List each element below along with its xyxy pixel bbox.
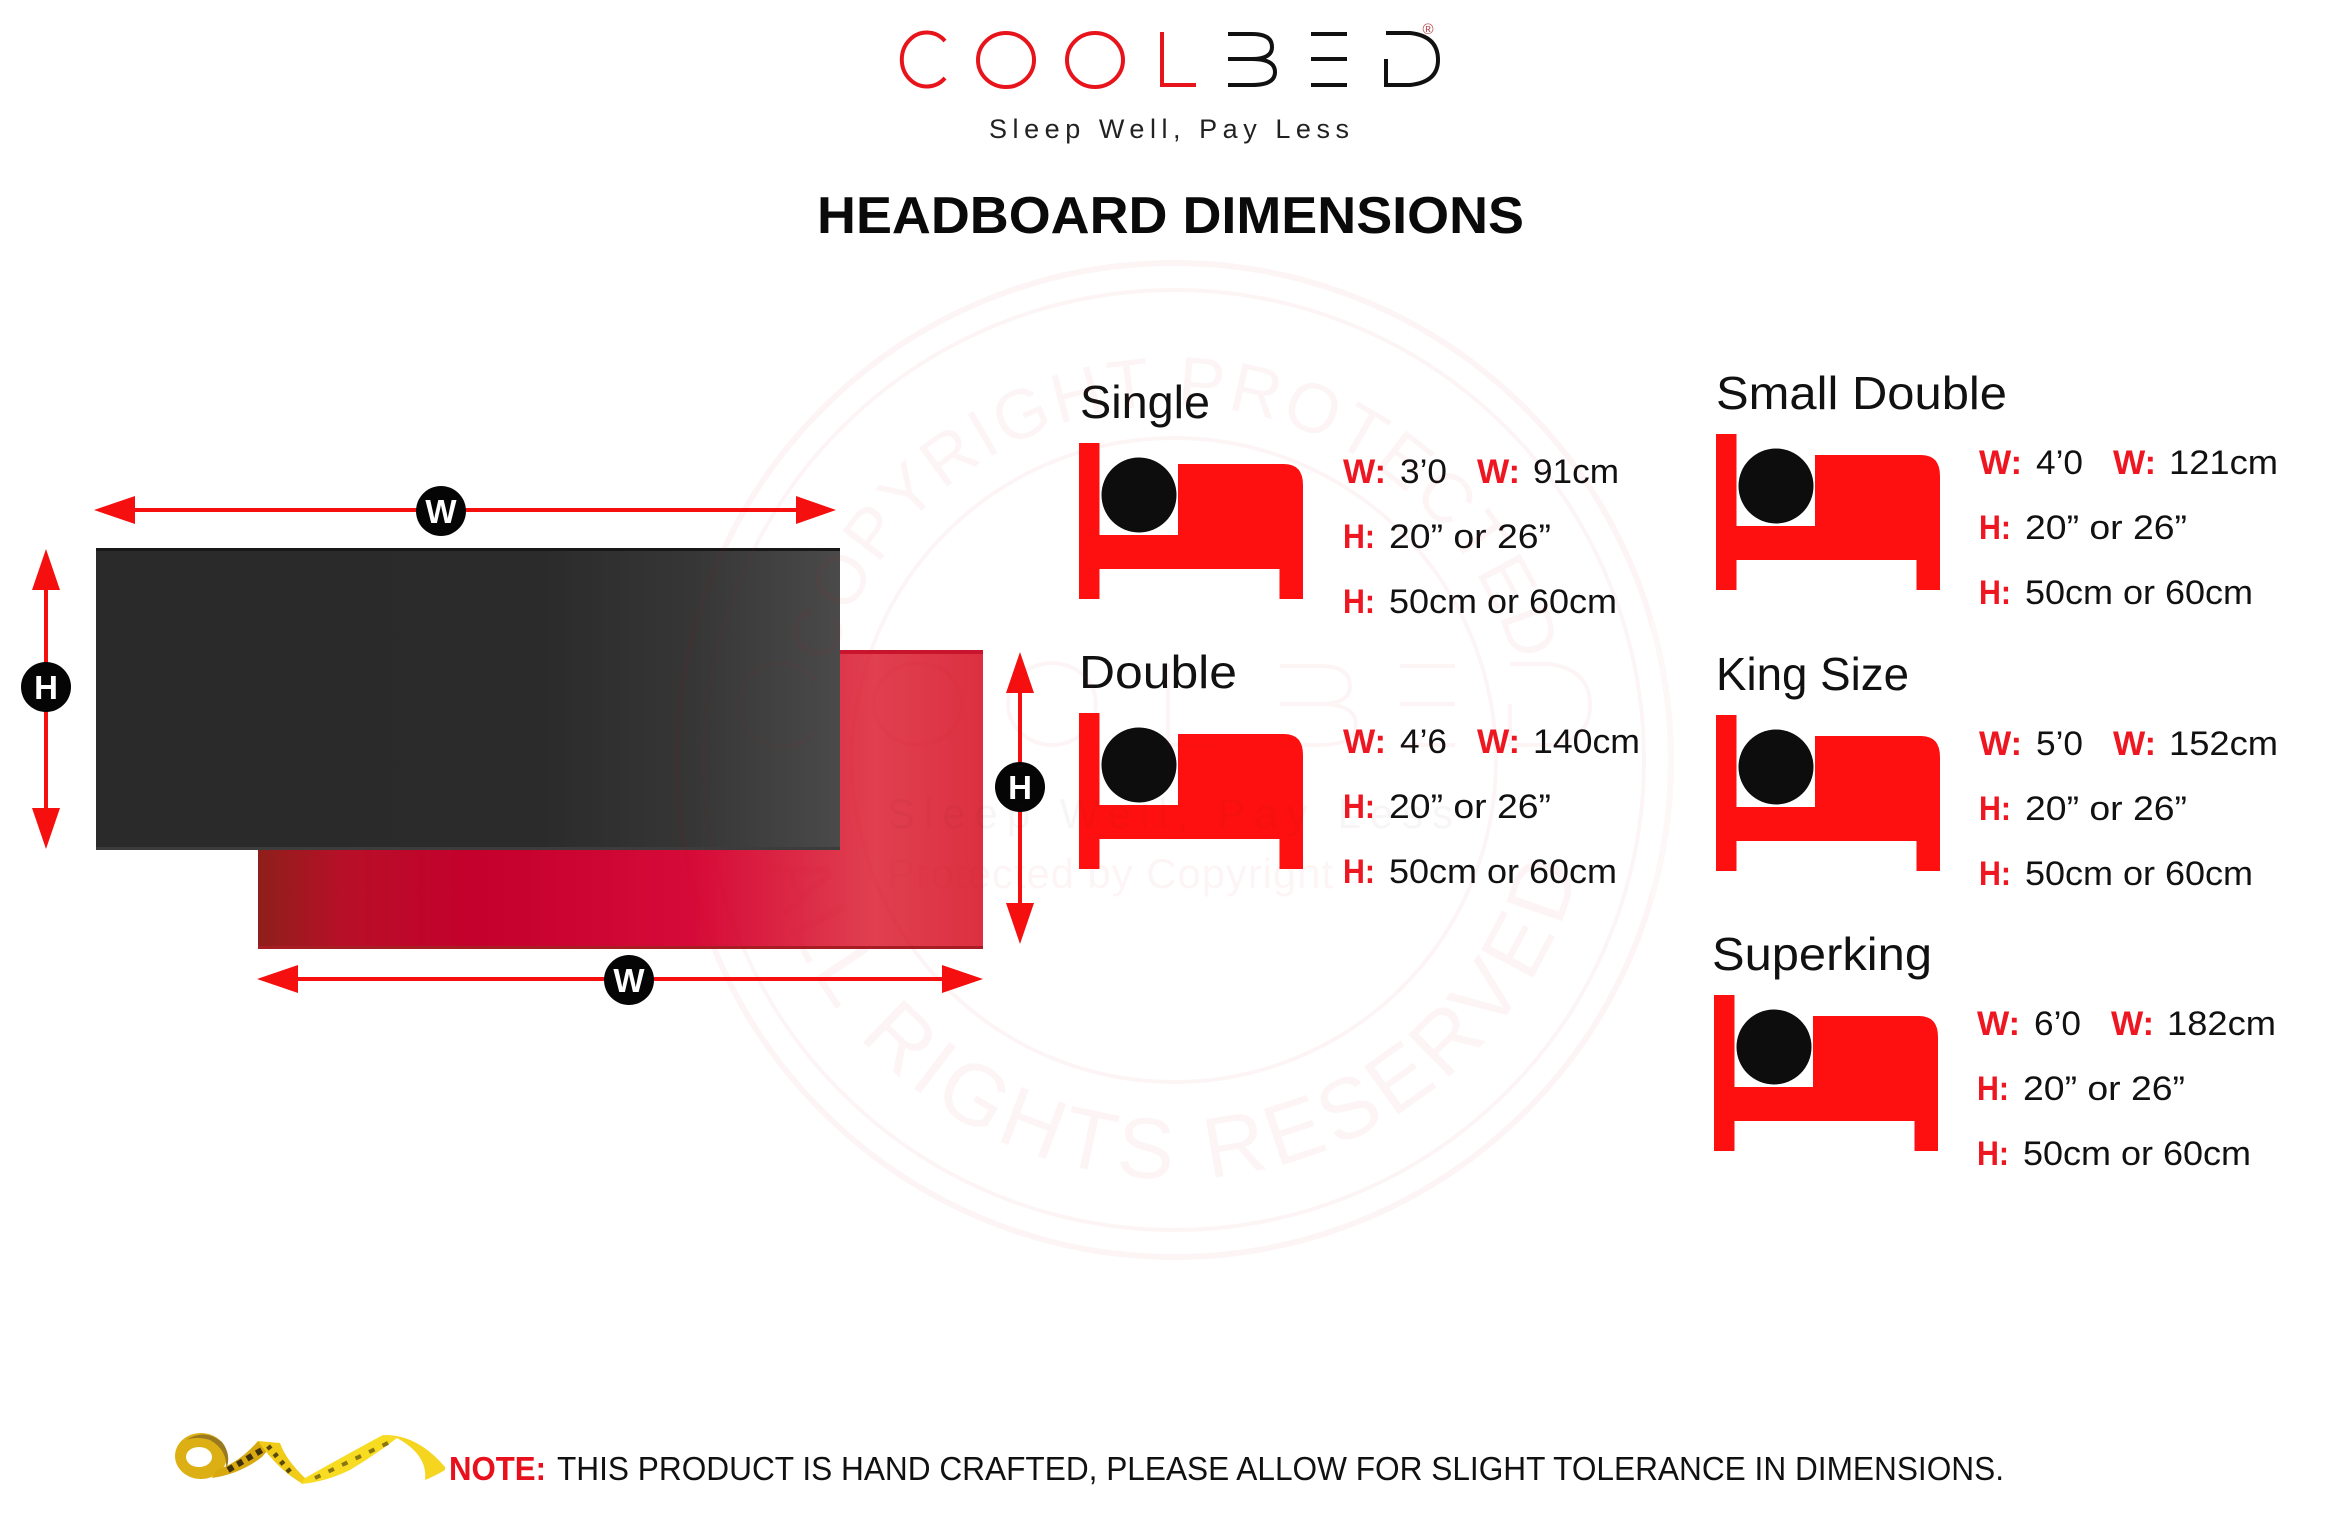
dimensions: W: — [1979, 725, 2022, 763]
dimensions: H: — [1979, 855, 2011, 893]
note: THIS PRODUCT IS HAND CRAFTED, PLEASE ALLOW FOR SLIGHT TOLERANCE IN DIMENSIONS. — [557, 1450, 2004, 1487]
tagline: Sleep Well, Pay Less — [989, 114, 1349, 144]
heading: King Size — [1716, 648, 1909, 700]
icon: bed — [1714, 995, 1938, 1151]
badge: W: W — [425, 493, 457, 530]
title: HEADBOARD DIMENSIONS — [817, 187, 1524, 245]
dimensions: 50cm or 60cm — [2025, 574, 2253, 612]
dimensions: H: — [1977, 1070, 2009, 1108]
dimensions: 50cm or 60cm — [2023, 1135, 2251, 1173]
logo wordmark: COOL — [902, 32, 1196, 87]
dimensions — [1343, 723, 1640, 891]
dimensions: W: — [1979, 444, 2022, 482]
dimensions: 3’0 — [1400, 453, 1447, 491]
dimensions: 4’6 — [1400, 723, 1447, 761]
watermark: Protected by Copyright — [887, 850, 1333, 897]
panel: Superking — [1712, 928, 2276, 1173]
dimensions: H: — [1343, 518, 1375, 556]
dimensions: 152cm — [2169, 725, 2278, 763]
dimensions: H: — [1343, 583, 1375, 621]
logo wordmark: BED — [1228, 33, 1438, 85]
dimensions: 91cm — [1533, 453, 1619, 491]
dimensions: 50cm or 60cm — [1389, 583, 1617, 621]
dimensions: H: — [1979, 509, 2011, 547]
icon: bed — [1079, 443, 1303, 599]
dimensions: H: — [1977, 1135, 2009, 1173]
dimensions: 4’0 — [2036, 444, 2083, 482]
arrow: top width — [94, 486, 836, 536]
dimensions: H: — [1343, 788, 1375, 826]
dimensions: 140cm — [1533, 723, 1640, 761]
watermark: COPYRIGHT PROTECTED — [840, 358, 1554, 653]
dimensions: 20” or 26” — [2023, 1070, 2185, 1108]
black headboard — [96, 548, 840, 850]
dimensions: W: — [2113, 725, 2156, 763]
dimensions: W: — [1343, 453, 1386, 491]
dimensions: W: — [1343, 723, 1386, 761]
badge: H — [995, 762, 1045, 812]
heading: Single — [1080, 376, 1210, 428]
dimensions: 50cm or 60cm — [2025, 855, 2253, 893]
watermark — [712, 260, 1652, 1260]
dimensions: W: — [1477, 723, 1520, 761]
icon: measuring tape — [175, 1433, 445, 1484]
dimensions: W: — [2113, 444, 2156, 482]
note: NOTE: — [449, 1450, 546, 1487]
badge: W — [604, 955, 654, 1005]
dimensions: 20” or 26” — [1389, 788, 1551, 826]
badge: H — [21, 662, 71, 712]
arrow: right height — [995, 652, 1045, 944]
heading: Double — [1079, 646, 1237, 698]
watermark: Sleep Well, Pay Less — [887, 790, 1453, 837]
dimensions: 182cm — [2167, 1005, 2276, 1043]
tape ribbon — [212, 1435, 445, 1484]
dimensions: W: — [2111, 1005, 2154, 1043]
dimensions: 6’0 — [2034, 1005, 2081, 1043]
red headboard — [258, 650, 983, 949]
heading: Superking — [1712, 928, 1932, 980]
dimensions — [1977, 1005, 2276, 1173]
panel: King Size — [1716, 648, 2278, 893]
dimensions: W: — [1477, 453, 1520, 491]
dimensions — [1343, 453, 1619, 621]
dimensions: 20” or 26” — [2025, 509, 2187, 547]
arrow: left height — [21, 549, 71, 849]
logo — [902, 21, 1438, 144]
badge: H: H — [1008, 769, 1032, 806]
dimensions: H: — [1343, 853, 1375, 891]
dimensions — [1979, 444, 2278, 612]
arrow: bottom width — [257, 955, 983, 1005]
panel: Double — [1079, 646, 1640, 891]
icon: bed — [1716, 715, 1940, 871]
watermark: ALL RIGHTS RESERVED — [800, 862, 1571, 1178]
badge: W — [416, 486, 466, 536]
dimensions: 20” or 26” — [1389, 518, 1551, 556]
badge: H: H — [34, 669, 58, 706]
dimensions: 50cm or 60cm — [1389, 853, 1617, 891]
icon: bed — [1079, 713, 1303, 869]
dimensions: W: — [1977, 1005, 2020, 1043]
badge: W: W — [613, 962, 645, 999]
dimensions: H: — [1979, 790, 2011, 828]
panel: Single — [1079, 376, 1619, 621]
tape coil — [175, 1433, 228, 1479]
registered mark: ® — [1422, 21, 1434, 38]
panel: Small Double — [1716, 367, 2278, 612]
dimensions: 20” or 26” — [2025, 790, 2187, 828]
dimensions — [1979, 725, 2278, 893]
dimensions: 5’0 — [2036, 725, 2083, 763]
dimensions: 121cm — [2169, 444, 2278, 482]
heading: Small Double — [1716, 367, 2007, 419]
dimensions: H: — [1979, 574, 2011, 612]
icon: bed — [1716, 434, 1940, 590]
